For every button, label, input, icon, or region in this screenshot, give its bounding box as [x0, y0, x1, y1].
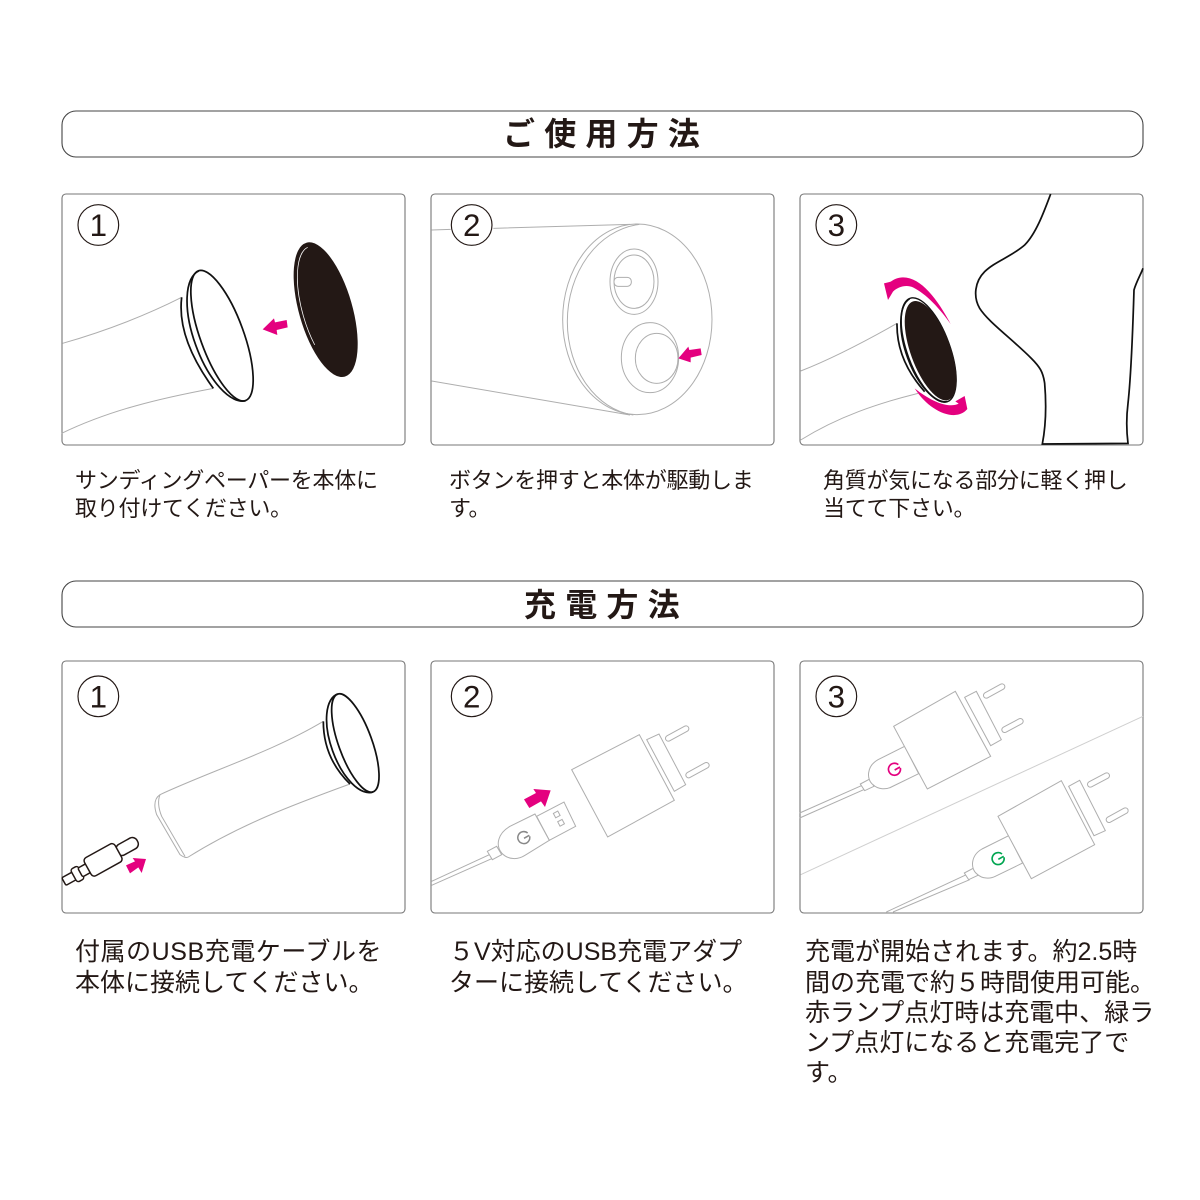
panel: usage step 1: [62, 194, 405, 445]
USB connector and cable: [432, 802, 576, 885]
text: charging step 3: 充電が開始されます。約2.5時: [805, 938, 1137, 966]
rotation arrow upper: [884, 277, 951, 324]
device body: [155, 688, 389, 857]
heading: usage: ご使用方法: [503, 116, 709, 152]
text: charging step 3: 間の充電で約５時間使用可能。: [805, 969, 1155, 997]
arrow pressing button: [678, 347, 702, 362]
divider between states: [801, 716, 1143, 875]
text: charging step 1: 本体に接続してください。: [75, 969, 374, 997]
device with sanding disc: [801, 291, 968, 440]
step number 3: [816, 676, 857, 717]
heading: usage: [62, 111, 1143, 157]
device end view with buttons: [432, 224, 712, 415]
skin outline: [976, 194, 1143, 444]
text: usage step 3: 当てて下さい。: [823, 496, 975, 521]
rotation arrow lower: [915, 388, 967, 415]
arrow toward device: [126, 858, 146, 873]
panel: charging step 3: [800, 661, 1143, 913]
panel: usage step 3: [800, 194, 1143, 445]
text: usage step 1: 取り付けてください。: [75, 496, 292, 521]
adapter with green lamp: [886, 776, 1125, 912]
step number 3: 3: [828, 679, 845, 714]
step number 3: 3: [828, 208, 845, 243]
device head with open lens: [62, 263, 266, 433]
panel: charging step 1: [59, 661, 405, 913]
text: usage step 1: サンディングペーパーを本体に: [75, 468, 378, 493]
text: charging step 3: 赤ランプ点灯時は充電中、緑ラ: [805, 999, 1154, 1027]
text: charging step 3: ンプ点灯になると充電完了で: [805, 1029, 1129, 1057]
arrow toward device: [263, 318, 288, 335]
text: charging step 2: ５V対応のUSB充電アダプ: [449, 938, 742, 966]
step number 2: 2: [463, 679, 480, 714]
step number 1: [78, 205, 119, 245]
AC adapter: [572, 729, 706, 837]
step number 1: 1: [90, 208, 107, 243]
arrow toward adapter: [524, 789, 551, 808]
step number 1: [78, 676, 119, 717]
panel: charging step 2: [431, 661, 774, 913]
text: usage step 2: す。: [449, 496, 490, 521]
step number 2: 2: [463, 208, 480, 243]
text: usage step 2: ボタンを押すと本体が駆動しま: [449, 468, 754, 493]
text: usage step 3: 角質が気になる部分に軽く押し: [823, 468, 1128, 493]
text: charging step 2: ターに接続してください。: [449, 969, 748, 997]
text: charging step 3: す。: [805, 1059, 853, 1087]
sanding paper disc: [281, 235, 370, 384]
USB cable plug: [59, 832, 142, 891]
step number 2: [451, 676, 492, 717]
heading: charging: [62, 581, 1143, 627]
step number 2: [451, 205, 492, 245]
text: charging step 1: 付属のUSB充電ケーブルを: [75, 938, 382, 966]
heading: charging: 充電方法: [524, 587, 689, 623]
adapter with red lamp: [800, 687, 1020, 818]
panel: usage step 2: [431, 194, 774, 445]
step number 3: [816, 205, 857, 245]
step number 1: 1: [90, 679, 107, 714]
